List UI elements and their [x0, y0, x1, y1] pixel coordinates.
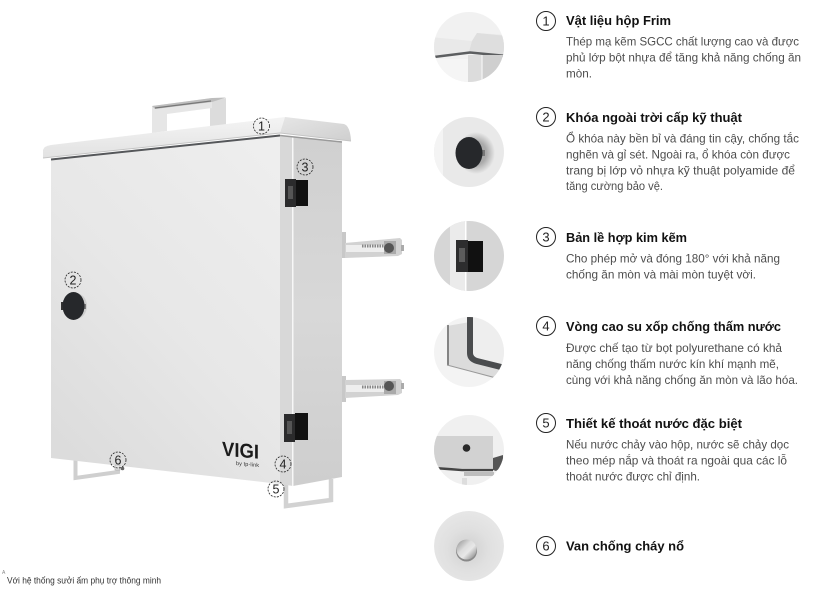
callout 1: [254, 118, 270, 134]
top handle: [152, 98, 226, 133]
body 3: chống ăn mòn và mài mòn tuyệt vời.: [566, 268, 756, 282]
callout 1: 1: [258, 120, 265, 134]
heading 1: Vật liệu hộp Frim: [566, 13, 671, 28]
feature 4: [536, 316, 798, 387]
body 2: Ổ khóa này bền bỉ và đáng tin cậy, chống tắc: [566, 130, 799, 146]
feature 1: [536, 12, 801, 80]
number badge 6: 6: [542, 538, 550, 554]
body 4: năng chống thấm nước kín khí mạnh mẽ,: [566, 357, 779, 371]
callout 3: [297, 159, 313, 175]
callout 5: [268, 481, 284, 497]
number badge 4: 4: [542, 318, 550, 334]
upper hinge: [285, 179, 308, 207]
mounting bracket upper: [342, 232, 404, 258]
VIGI logo: VIGI: [222, 439, 259, 464]
detail photo 3: hinge: [434, 221, 504, 291]
detail photo 6: explosion-proof valve: [434, 511, 504, 581]
body 5: theo mép nắp và thoát ra ngoài qua các lỗ: [566, 452, 787, 468]
product illustration: outdoor enclosure: [43, 98, 404, 506]
body 1: Thép mạ kẽm SGCC chất lượng cao và được: [566, 34, 799, 48]
feature 5: [536, 414, 789, 484]
number badge 2: [536, 108, 556, 126]
number badge 4: [536, 316, 556, 336]
mounting bracket lower: [342, 376, 404, 402]
body 3: [566, 252, 780, 282]
body 5: Nếu nước chảy vào hộp, nước sẽ chảy dọc: [566, 438, 789, 452]
roof: [43, 117, 351, 160]
detail photo 5: drainage: [434, 415, 504, 485]
lock knob: [61, 292, 87, 320]
number badge 3: [536, 228, 556, 246]
lower hinge: [284, 413, 308, 442]
body 2: nghẽn và gỉ sét. Ngoài ra, ổ khóa còn được: [566, 148, 790, 162]
body 1: [566, 34, 801, 80]
body 3: Cho phép mở và đóng 180° với khả năng: [566, 252, 780, 266]
callout 4: [275, 456, 291, 472]
heading 2: Khóa ngoài trời cấp kỹ thuật: [566, 110, 743, 125]
callout 2: [65, 272, 81, 288]
heading 5: Thiết kế thoát nước đặc biệt: [566, 416, 743, 431]
number badge 5: 5: [542, 416, 550, 430]
heading 3: Bản lề hợp kim kẽm: [566, 230, 687, 245]
callout 5: 5: [273, 482, 280, 496]
body 4: Được chế tạo từ bọt polyurethane có khả: [566, 341, 782, 355]
drain vent valve: [115, 465, 124, 470]
foot left: [76, 460, 118, 478]
callout 6: 6: [115, 454, 122, 468]
detail photo 2: lock: [434, 117, 504, 187]
body 2: tăng cường bảo vệ.: [566, 179, 663, 193]
detail photo 4: foam gasket: [434, 317, 504, 387]
number badge 2: 2: [542, 110, 550, 124]
callout 2: 2: [70, 274, 77, 288]
callout 3: 3: [302, 160, 309, 174]
enclosure side: [293, 137, 342, 486]
callout 4: 4: [280, 458, 287, 472]
callout 6: [110, 452, 126, 468]
body 1: mòn.: [566, 66, 592, 80]
number badge 1: [536, 12, 556, 30]
detail photo 1: frame material: [434, 12, 504, 82]
feature 2: [536, 108, 799, 193]
heading 4: Vòng cao su xốp chống thấm nước: [566, 319, 781, 334]
door edge strip: [280, 136, 293, 486]
body 5: thoát nước được chỉ định.: [566, 470, 700, 484]
footnote: A: [2, 570, 6, 576]
footnote: [2, 570, 161, 586]
body 4: [566, 341, 798, 387]
heading 6: Van chống cháy nổ: [566, 538, 684, 554]
enclosure front door: [51, 136, 280, 484]
body 4: cùng với khả năng chống ăn mòn và lão hóa.: [566, 373, 798, 387]
footnote: Với hệ thống sưởi ấm phụ trợ thông minh: [7, 576, 161, 586]
number badge 6: [536, 536, 556, 556]
body 2: trang bị lớp vỏ nhựa kỹ thuật polyamide để: [566, 164, 795, 178]
VIGI logo: by tp-link: [236, 461, 259, 469]
number badge 3: 3: [542, 230, 550, 244]
body 2: [566, 130, 799, 193]
body 5: [566, 438, 789, 484]
number badge 5: [536, 414, 556, 432]
body 1: phủ lớp bột nhựa để tăng khả năng chống ăn: [566, 50, 801, 64]
number badge 1: 1: [542, 14, 550, 28]
foot right: [286, 479, 331, 506]
feature 3: [536, 228, 780, 282]
feature 6: [536, 536, 684, 556]
